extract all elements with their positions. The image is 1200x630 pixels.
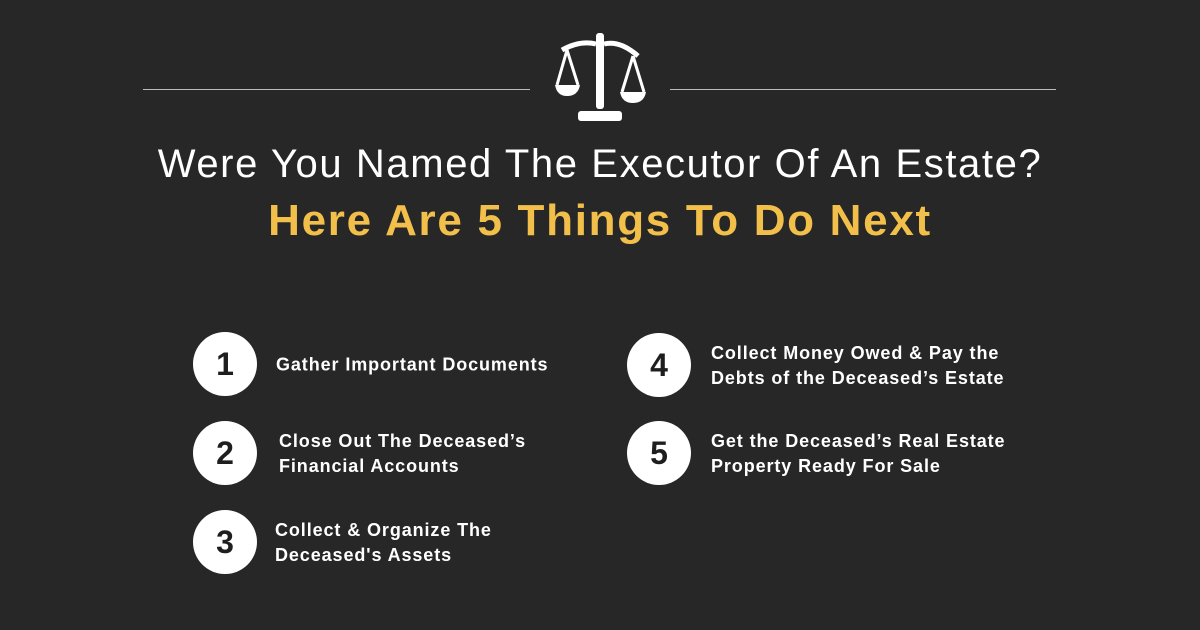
item 4	[627, 333, 1004, 397]
item 3	[193, 510, 492, 574]
item 5: Property Ready For Sale	[711, 456, 941, 476]
item 5	[627, 421, 1005, 485]
title: Were You Named The Executor Of An Estate?	[158, 142, 1042, 186]
subtitle: Here Are 5 Things To Do Next	[268, 196, 932, 245]
item 4: Debts of the Deceased’s Estate	[711, 368, 1004, 388]
item 2: Close Out The Deceased’s	[279, 431, 526, 451]
item 4: Collect Money Owed & Pay the	[711, 343, 999, 363]
item 1: 1	[216, 346, 234, 382]
item 2: Financial Accounts	[279, 456, 460, 476]
item 1	[193, 332, 548, 396]
item 3: Deceased's Assets	[275, 545, 452, 565]
item 3: Collect & Organize The	[275, 520, 492, 540]
item 2	[193, 421, 526, 485]
icon: scales of justice	[555, 33, 646, 121]
item 4: 4	[650, 347, 668, 383]
item 3: 3	[216, 524, 234, 560]
item 5: Get the Deceased’s Real Estate	[711, 431, 1005, 451]
item 1: Gather Important Documents	[276, 354, 548, 374]
item 2: 2	[216, 435, 234, 471]
item 5: 5	[650, 435, 668, 471]
